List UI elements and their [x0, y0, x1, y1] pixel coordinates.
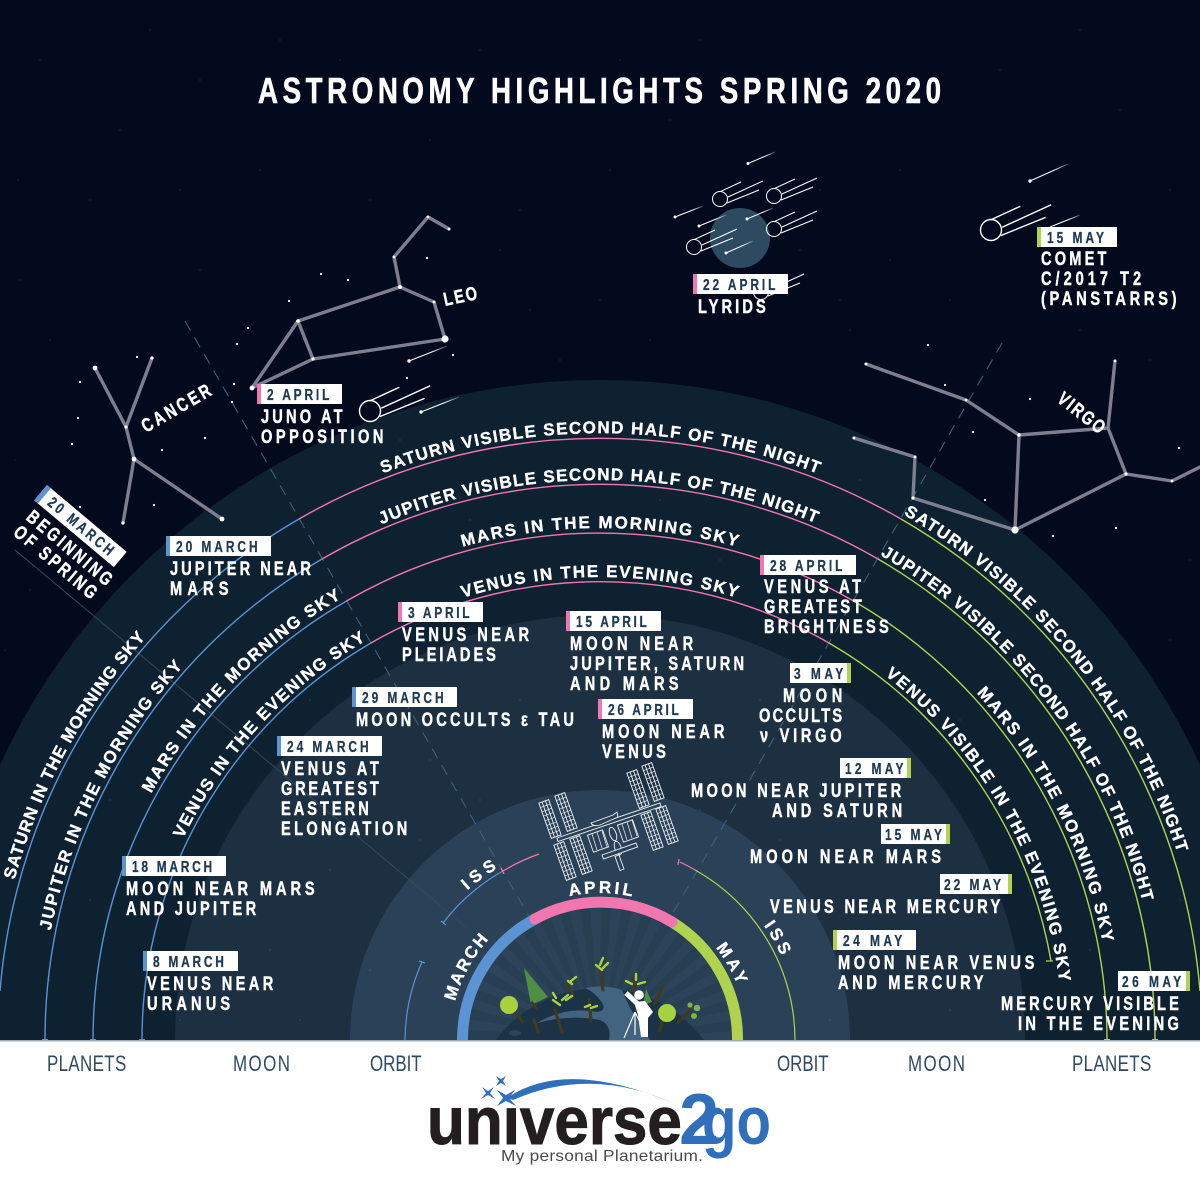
event: 22 April Lyrids [693, 274, 788, 317]
axis labels: ORBIT [777, 1052, 829, 1077]
event: 15 April Moon near planets: JUPITER, SATURN [570, 653, 744, 674]
orbit arcs: Venus [139, 582, 1053, 1040]
arc label: Mars morning right: MARS IN THE MORNING SKY [977, 686, 1114, 940]
event: 22 April Lyrids: LYRIDS [698, 296, 766, 317]
event: 22 May Venus near Mercury: 22 MAY [944, 875, 1001, 893]
arc label: Jupiter visible top: JUPITER VISIBLE SECOND HALF OF THE NIGHT [380, 468, 820, 524]
dashed month divider: March to April [185, 321, 560, 970]
shooting stars [407, 152, 1080, 414]
event: 20 March Jupiter near Mars [166, 536, 311, 599]
arc label: Jupiter morning: JUPITER IN THE MORNING SKY [40, 658, 180, 930]
footer panel [0, 1040, 1200, 1200]
event: 28 April Venus brightness [760, 555, 889, 637]
arc label: Mars morning top: MARS IN THE MORNING SKY [460, 516, 740, 547]
logo: universe [427, 1084, 682, 1159]
event: 26 May Mercury visible: IN THE EVENING [1018, 1013, 1179, 1034]
event: 28 April Venus brightness: BRIGHTNESS [764, 616, 889, 637]
event: 22 May Venus near Mercury: VENUS NEAR MERCURY [770, 896, 1001, 917]
event: 29 March Moon occults tau: 29 MARCH [362, 688, 444, 706]
axis labels: MOON [233, 1052, 290, 1077]
event: 26 April Moon near Venus: 26 APRIL [608, 700, 679, 718]
event: 24 March Venus elongation: VENUS AT [281, 758, 379, 779]
event: 3 May Moon occults v Virgo: OCCULTS [759, 705, 842, 726]
axis labels [47, 1052, 1151, 1077]
event: 24 March Venus elongation: GREATEST [281, 778, 379, 799]
month ring [462, 902, 738, 1040]
ISS label right: ISS [764, 920, 791, 954]
event: 2 April Juno: JUNO AT [261, 406, 343, 427]
event: 26 May Mercury visible: MERCURY VISIBLE [1001, 993, 1179, 1014]
arc label: Saturn visible right: SATURN VISIBLE SECOND HALF OF THE NIGHT [905, 506, 1189, 850]
event: 26 April Moon near Venus: VENUS [602, 741, 666, 762]
title: ASTRONOMY HIGHLIGHTS SPRING 2020 [258, 71, 941, 111]
icon: comet C/2017 T2 [980, 205, 1051, 240]
event: 8 March Venus near Uranus [143, 951, 273, 1014]
axis labels: PLANETS [47, 1052, 126, 1077]
constellation: Cancer [93, 356, 224, 525]
event: 15 May Moon near Mars: MOON NEAR MARS [750, 846, 941, 867]
dashed month divider: April to May [640, 343, 1002, 970]
constellation: Leo [250, 216, 450, 390]
ISS arcs left [405, 854, 539, 1040]
event: 15 May comet: C/2017 T2 [1041, 268, 1141, 289]
event: 18 March Moon near Mars and Jupiter: MOON NEAR MARS [126, 878, 315, 899]
arc label: Venus evening top: VENUS IN THE EVENING SKY [459, 565, 740, 597]
orbit arcs: Jupiter [42, 484, 1158, 1040]
orbit arcs: Mars [90, 533, 1110, 1040]
ISS label left: ISS [460, 860, 496, 890]
background band: moon [175, 615, 1025, 1040]
month label: April: APRIL [570, 881, 632, 896]
event: 29 March Moon occults tau: MOON OCCULTS ε TAU [356, 709, 574, 730]
arc label: Venus visible right: VENUS VISIBLE IN THE EVENING SKY [888, 666, 1072, 980]
arc label: Jupiter visible right: JUPITER VISIBLE SECOND HALF OF THE NIGHT [882, 546, 1154, 899]
event: 15 May comet [1037, 227, 1177, 309]
event: 18 March Moon near Mars and Jupiter [122, 856, 315, 919]
event: 26 May Mercury visible: 26 MAY [1122, 972, 1181, 990]
orbit arcs: Saturn [0, 438, 1200, 991]
event: 20 March Jupiter near Mars: 20 MARCH [176, 537, 258, 555]
icon: Juno comet [360, 386, 430, 422]
event: 20 March beginning of spring: 20 MARCH [44, 493, 118, 559]
event: 12 May Moon near Jupiter and Saturn: AND SATURN [772, 800, 902, 821]
event: 24 May Moon near Venus and Mercury: MOON NEAR VENUS [838, 952, 1034, 973]
axis labels: ORBIT [370, 1052, 422, 1077]
event: 28 April Venus brightness: VENUS AT [764, 576, 862, 597]
label: Cancer: CANCER [138, 380, 215, 437]
event: 15 April Moon near planets [566, 611, 744, 694]
thin line: beginning of spring [15, 550, 467, 928]
event: 3 May Moon occults v Virgo: 3 MAY [794, 664, 843, 682]
ISS arcs right [678, 859, 795, 1040]
background band: outer sky disc [0, 380, 1200, 1040]
label: Virgo: VIRGO [1053, 388, 1109, 438]
event: 24 May Moon near Venus and Mercury: 24 MAY [843, 931, 902, 949]
event: 3 April Venus near Pleiades [398, 602, 529, 665]
event: 3 May Moon occults v Virgo: ν VIRGO [760, 725, 842, 746]
event: 15 April Moon near planets: 15 APRIL [576, 612, 647, 630]
event: 8 March Venus near Uranus: VENUS NEAR [147, 973, 273, 994]
event: 2 April Juno: 2 APRIL [267, 385, 330, 403]
central rays and planet scene [468, 908, 732, 1040]
icon: Lyrids meteor shower [686, 178, 817, 300]
event: 2 April Juno: OPPOSITION [261, 426, 383, 447]
arc label: Venus evening left: VENUS IN THE EVENING SKY [172, 630, 362, 836]
event: 15 May comet: 15 MAY [1047, 228, 1104, 246]
telescope observer [624, 990, 653, 1038]
logo [427, 1076, 771, 1165]
arc label: Mars morning left: MARS IN THE MORNING SKY [141, 588, 338, 793]
label: Leo: LEO [442, 283, 479, 310]
event: 3 April Venus near Pleiades: PLEIADES [402, 644, 496, 665]
event: 26 May Mercury visible [1001, 971, 1190, 1034]
event: 12 May Moon near Jupiter and Saturn: 12 MAY [845, 759, 904, 777]
event: 3 April Venus near Pleiades: VENUS NEAR [402, 624, 529, 645]
event: 3 April Venus near Pleiades: 3 APRIL [408, 603, 470, 621]
event: 15 May comet: (PANSTARRS) [1041, 288, 1177, 309]
event: 15 April Moon near planets: AND MARS [570, 673, 679, 694]
event: 20 March beginning of spring [6, 485, 132, 605]
event: 20 March Jupiter near Mars: JUPITER NEAR [170, 558, 311, 579]
event: 22 May Venus near Mercury [770, 874, 1012, 917]
icon: space station [539, 763, 678, 880]
arc label: Saturn morning: SATURN IN THE MORNING SKY [4, 630, 143, 879]
constellation: Virgo [853, 360, 1200, 534]
event: 24 March Venus elongation: 24 MARCH [287, 737, 369, 755]
icon: moon in Lyrids [710, 208, 770, 268]
event: 24 March Venus elongation [277, 736, 407, 839]
event: 15 May Moon near Mars [750, 824, 950, 867]
event: 3 May Moon occults v Virgo [759, 663, 851, 746]
event: 18 March Moon near Mars and Jupiter: 18 MARCH [132, 857, 212, 875]
logo: go [702, 1083, 771, 1159]
month label: May: MAY [716, 941, 748, 981]
event: 8 March Venus near Uranus: 8 MARCH [153, 952, 224, 970]
background band: orbit [350, 790, 850, 1040]
event: 26 April Moon near Venus [598, 699, 724, 762]
event: 24 March Venus elongation: ELONGATION [281, 818, 407, 839]
event: 15 May Moon near Mars: 15 MAY [885, 825, 942, 843]
month label: March: MARCH [444, 932, 488, 1000]
trees [500, 958, 700, 1032]
event: 15 May comet: COMET [1041, 248, 1107, 269]
event: 12 May Moon near Jupiter and Saturn: MOON NEAR JUPITER [691, 780, 901, 801]
footer divider [0, 1040, 1200, 1042]
event: 22 April Lyrids: 22 APRIL [703, 275, 776, 293]
event: 3 May Moon occults v Virgo: MOON [783, 685, 842, 706]
event: 29 March Moon occults tau [352, 687, 574, 730]
event: 28 April Venus brightness: 28 APRIL [770, 556, 843, 574]
event: 20 March beginning of spring: OF SPRING [9, 521, 102, 603]
event: 18 March Moon near Mars and Jupiter: AND JUPITER [126, 898, 256, 919]
faint stars on bands [50, 440, 1180, 1020]
event: 24 May Moon near Venus and Mercury: AND MERCURY [838, 972, 984, 993]
event: 24 May Moon near Venus and Mercury [833, 930, 1034, 993]
event: 20 March beginning of spring: BEGINNING [22, 506, 117, 590]
logo: 2 [679, 1080, 719, 1160]
event: 8 March Venus near Uranus: URANUS [147, 993, 230, 1014]
event: 24 March Venus elongation: EASTERN [281, 798, 369, 819]
event: 26 April Moon near Venus: MOON NEAR [602, 721, 724, 742]
event: 15 April Moon near planets: MOON NEAR [570, 633, 693, 654]
event: 28 April Venus brightness: GREATEST [764, 596, 862, 617]
event: 12 May Moon near Jupiter and Saturn [691, 758, 911, 821]
star field [5, 30, 1190, 650]
axis labels: MOON [908, 1052, 965, 1077]
axis labels: PLANETS [1072, 1052, 1151, 1077]
arc label: Saturn visible top: SATURN VISIBLE SECOND HALF OF THE NIGHT [380, 421, 822, 472]
event: 2 April Juno [257, 384, 383, 447]
logo: My personal Planetarium. [501, 1147, 703, 1165]
event: 20 March Jupiter near Mars: MARS [170, 578, 229, 599]
